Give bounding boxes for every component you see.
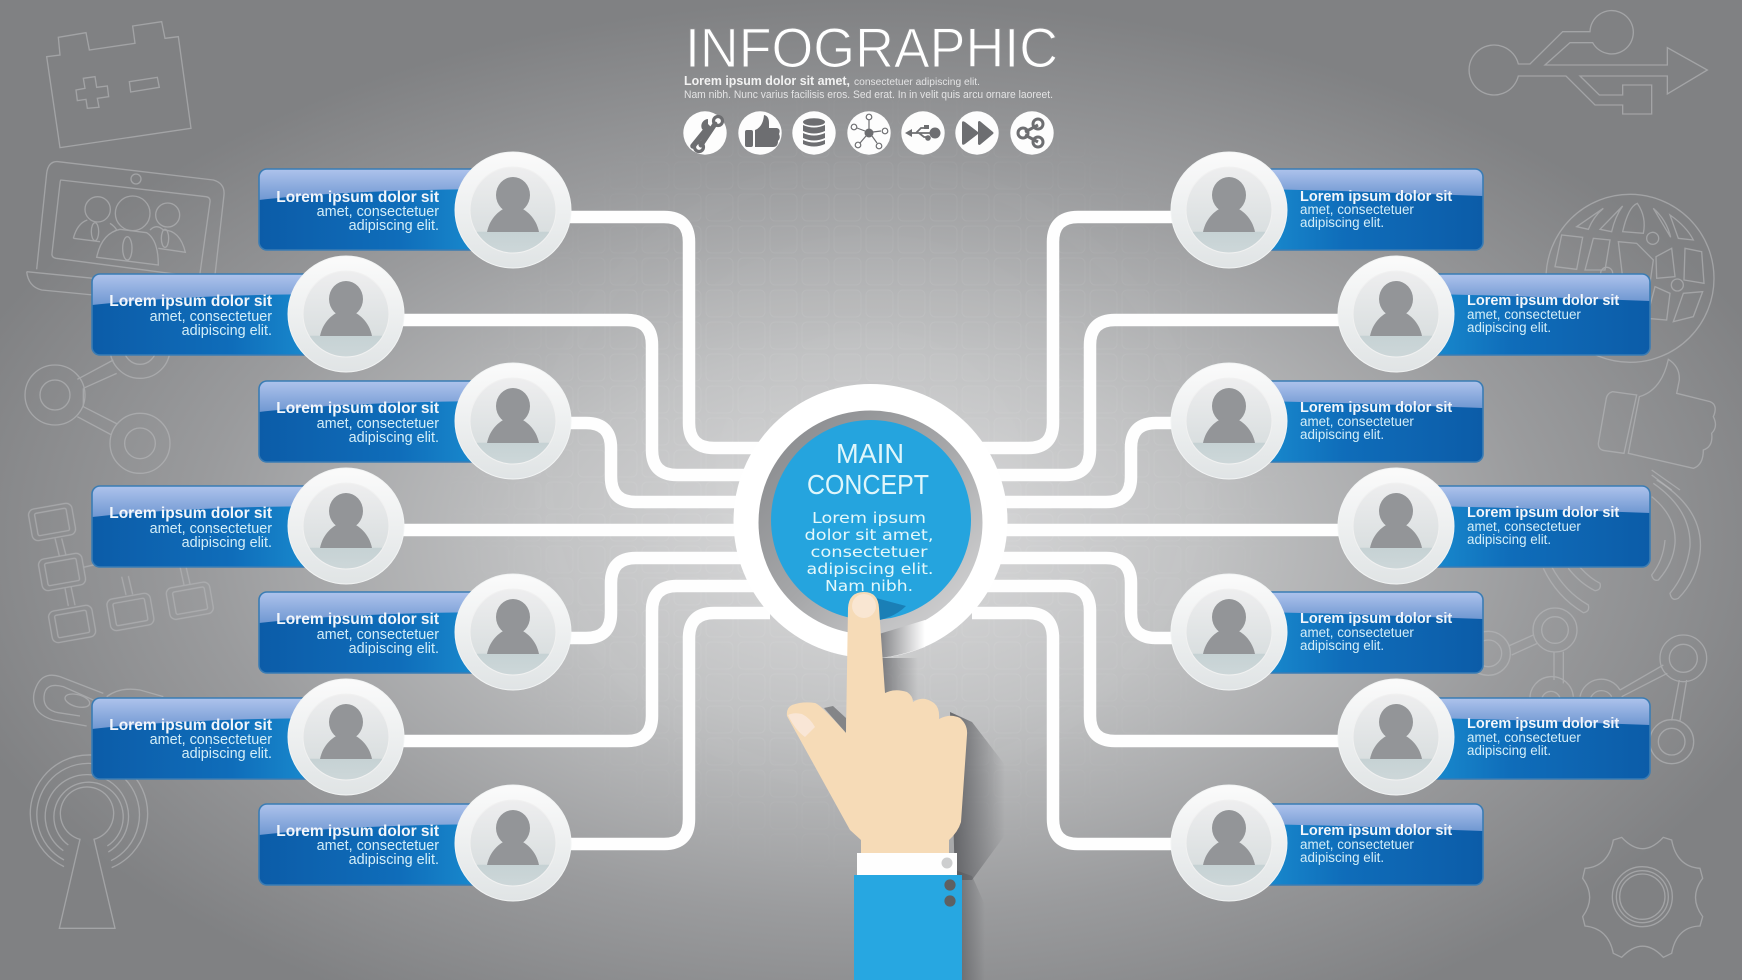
card: right row 1: adipiscing elit. [1300, 215, 1384, 230]
background outline icons, right [1466, 11, 1715, 957]
card: left row 1: adipiscing elit. [349, 218, 439, 234]
card: right row 6: amet, consectetuer [1467, 730, 1581, 745]
icon: wireless arcs outline [1543, 480, 1700, 613]
icon: wireless tower outline [30, 755, 148, 928]
card: left row 3: adipiscing elit. [349, 430, 439, 446]
card: left row 6: adipiscing elit. [182, 746, 272, 762]
icon: wrenches [683, 111, 727, 155]
finger nail [852, 594, 876, 618]
card: left row 2: amet, consectetuer [150, 309, 272, 325]
card: right row 5: adipiscing elit. [1300, 638, 1384, 653]
card: right row 6: adipiscing elit. [1467, 743, 1551, 758]
hand shape [787, 592, 967, 853]
card: left row 4 [92, 486, 346, 567]
card: right row 3: amet, consectetuer [1300, 414, 1414, 429]
card: left row 5: Lorem ipsum dolor sit [276, 611, 439, 628]
main concept heading: CONCEPT [807, 469, 929, 500]
card: right row 2: Lorem ipsum dolor sit [1467, 293, 1619, 309]
card: right row 5: amet, consectetuer [1300, 625, 1414, 640]
card: left row 7: amet, consectetuer [317, 838, 439, 854]
card: right row 7: Lorem ipsum dolor sit [1300, 823, 1452, 839]
card: left row 3: amet, consectetuer [317, 416, 439, 432]
card: right row 2: adipiscing elit. [1467, 320, 1551, 335]
card: right row 7: amet, consectetuer [1300, 837, 1414, 852]
shirt cuff [857, 853, 957, 875]
card: right row 6 [1396, 698, 1650, 779]
card: left row 4: amet, consectetuer [150, 521, 272, 537]
connector lines, left [346, 217, 770, 844]
card: left row 3 [259, 381, 513, 462]
card: right row 1 [1229, 169, 1483, 250]
card: left row 1: Lorem ipsum dolor sit [276, 189, 439, 206]
icon: battery outline [47, 22, 191, 148]
card: right row 5 [1229, 592, 1483, 673]
title: INFOGRAPHIC [685, 16, 1058, 79]
card: right row 4 [1396, 486, 1650, 567]
card: right row 1: amet, consectetuer [1300, 202, 1414, 217]
person avatars, left [288, 152, 571, 901]
card: left row 2: adipiscing elit. [182, 323, 272, 339]
person avatars, right [1171, 152, 1454, 901]
thumb nail [788, 713, 815, 737]
subtitle text: Nam nibh. Nunc varius facilisis eros. Sed erat. In in velit quis arcu ornare laoreet. [684, 89, 1053, 101]
right cards [1229, 169, 1650, 885]
icon: usb [901, 111, 945, 155]
icon: flowchart outline [28, 502, 214, 644]
card: left row 7: Lorem ipsum dolor sit [276, 823, 439, 840]
card: right row 7 [1229, 804, 1483, 885]
subtitle text: Lorem ipsum dolor sit amet, [684, 74, 850, 88]
main concept body text: Lorem ipsum [812, 509, 926, 527]
finger shadow on ring [879, 620, 925, 658]
main concept body text: consectetuer [810, 543, 928, 561]
card: left row 7: adipiscing elit. [349, 852, 439, 868]
card: left row 3: Lorem ipsum dolor sit [276, 400, 439, 417]
card: left row 4: adipiscing elit. [182, 535, 272, 551]
background tile pattern [430, 60, 1310, 890]
main concept body text: adipiscing elit. [806, 560, 934, 578]
icon: fast forward [955, 111, 999, 155]
cuff button [942, 858, 952, 868]
main concept circle [734, 384, 1008, 658]
card: left row 6 [92, 698, 346, 779]
subtitle text [684, 74, 1053, 101]
main concept heading: MAIN [836, 438, 904, 469]
card: right row 3: adipiscing elit. [1300, 427, 1384, 442]
icon: gear outline [1583, 837, 1703, 957]
icon: laptop with people outline [27, 162, 224, 295]
icon: globe outline [1546, 194, 1714, 362]
card: left row 4: Lorem ipsum dolor sit [109, 505, 272, 522]
card: right row 3: Lorem ipsum dolor sit [1300, 400, 1452, 416]
icon: database [792, 111, 836, 155]
icon: share [1010, 111, 1054, 155]
card: right row 1: Lorem ipsum dolor sit [1300, 189, 1452, 205]
card: right row 2: amet, consectetuer [1467, 307, 1581, 322]
icon: usb outline [1469, 11, 1707, 114]
main concept body text: dolor sit amet, [804, 526, 934, 544]
icon: network hub [847, 111, 891, 155]
background outline icons, left [25, 22, 224, 928]
main concept body text: Nam nibh. [825, 577, 913, 595]
icon: share nodes outline [25, 318, 170, 473]
card: right row 2 [1396, 274, 1650, 355]
main concept heading [807, 438, 929, 500]
connector lines, right [972, 217, 1396, 844]
shadow under thumb [824, 706, 846, 733]
card: right row 4: amet, consectetuer [1467, 519, 1581, 534]
sleeve buttons [944, 879, 956, 907]
main concept body text [804, 509, 934, 595]
card: left row 5: adipiscing elit. [349, 641, 439, 657]
card: left row 5: amet, consectetuer [317, 627, 439, 643]
pointing hand [787, 592, 967, 980]
card: right row 4: Lorem ipsum dolor sit [1467, 505, 1619, 521]
card: right row 6: Lorem ipsum dolor sit [1467, 716, 1619, 732]
finger shadow on circle [876, 598, 906, 620]
card: left row 5 [259, 592, 513, 673]
card: left row 6: Lorem ipsum dolor sit [109, 717, 272, 734]
icon row [683, 111, 1054, 155]
left cards [92, 169, 513, 885]
card: left row 2: Lorem ipsum dolor sit [109, 293, 272, 310]
icon: thumbs up [738, 111, 782, 155]
card: left row 6: amet, consectetuer [150, 732, 272, 748]
icon: node network outline [1466, 608, 1707, 764]
card: left row 2 [92, 274, 346, 355]
card: right row 3 [1229, 381, 1483, 462]
card: right row 5: Lorem ipsum dolor sit [1300, 611, 1452, 627]
sleeve [854, 875, 962, 980]
card: left row 1 [259, 169, 513, 250]
hand shadow [880, 658, 1005, 980]
card: right row 7: adipiscing elit. [1300, 850, 1384, 865]
icon: link outline [34, 675, 163, 726]
card: right row 4: adipiscing elit. [1467, 532, 1551, 547]
card: left row 7 [259, 804, 513, 885]
subtitle text: consectetuer adipiscing elit. [854, 76, 980, 88]
card: left row 1: amet, consectetuer [317, 204, 439, 220]
icon: thumbs up outline [1598, 359, 1715, 490]
